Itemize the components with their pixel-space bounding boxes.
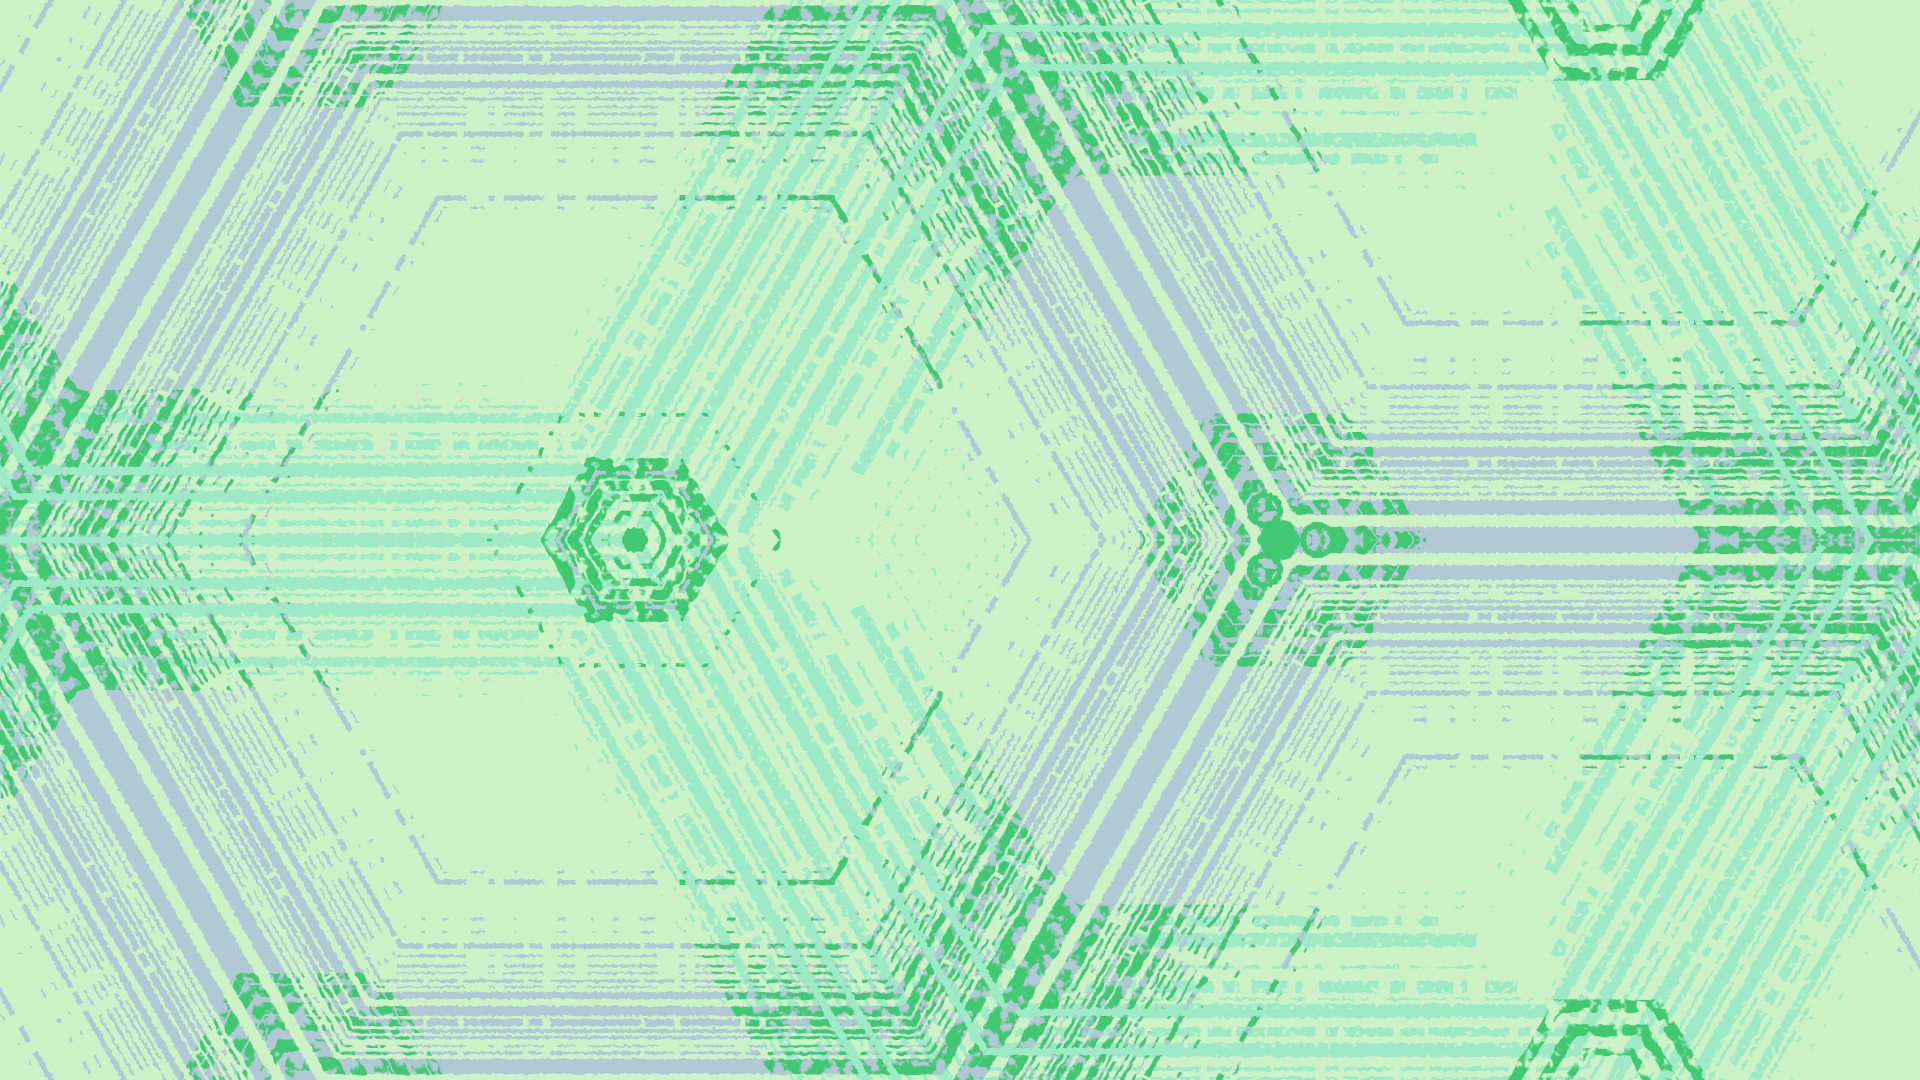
blue edge: along the top [298,0,968,208]
green stripes masked to the overlap zones [0,0,1920,767]
thin mint accents crossing the overlap zones [0,0,1920,613]
mint arm: far left upper branch [0,0,129,626]
blue hexagon network [0,0,1920,767]
icon: solid green core at right vertex [1257,521,1301,559]
mint edge: along the top right [948,0,1618,187]
green rings: centre hexagon [490,415,780,665]
mint diamond rings at centre [870,410,1030,670]
mint hexagon network [0,0,1920,695]
green hexagon rings on the mint vertices [490,0,1708,665]
green ring cluster near right core [1250,495,1333,555]
icon: blue ring around centre hexagon [558,473,712,607]
solid core details [558,473,1333,607]
mint edge: centre vertex to top [496,0,1143,652]
icon: solid green dot at centre hexagon [621,528,649,552]
blue edge: top left to left [0,0,514,666]
artwork: mirrored bottom half [0,313,1920,1080]
artwork: top half of the symmetric pattern [0,0,1920,767]
mint edge: top right to right [1419,0,1920,656]
blue edge: right vertex to top [753,0,1482,662]
blue arm: far right upper branch [1723,0,1920,662]
mint arm: centre vertex outward left [0,385,645,695]
blue arm: right vertex outward [1270,313,1920,767]
green rings: top right hexagon [1508,0,1708,74]
green overlap of the blue and mint bundles [0,0,1920,767]
